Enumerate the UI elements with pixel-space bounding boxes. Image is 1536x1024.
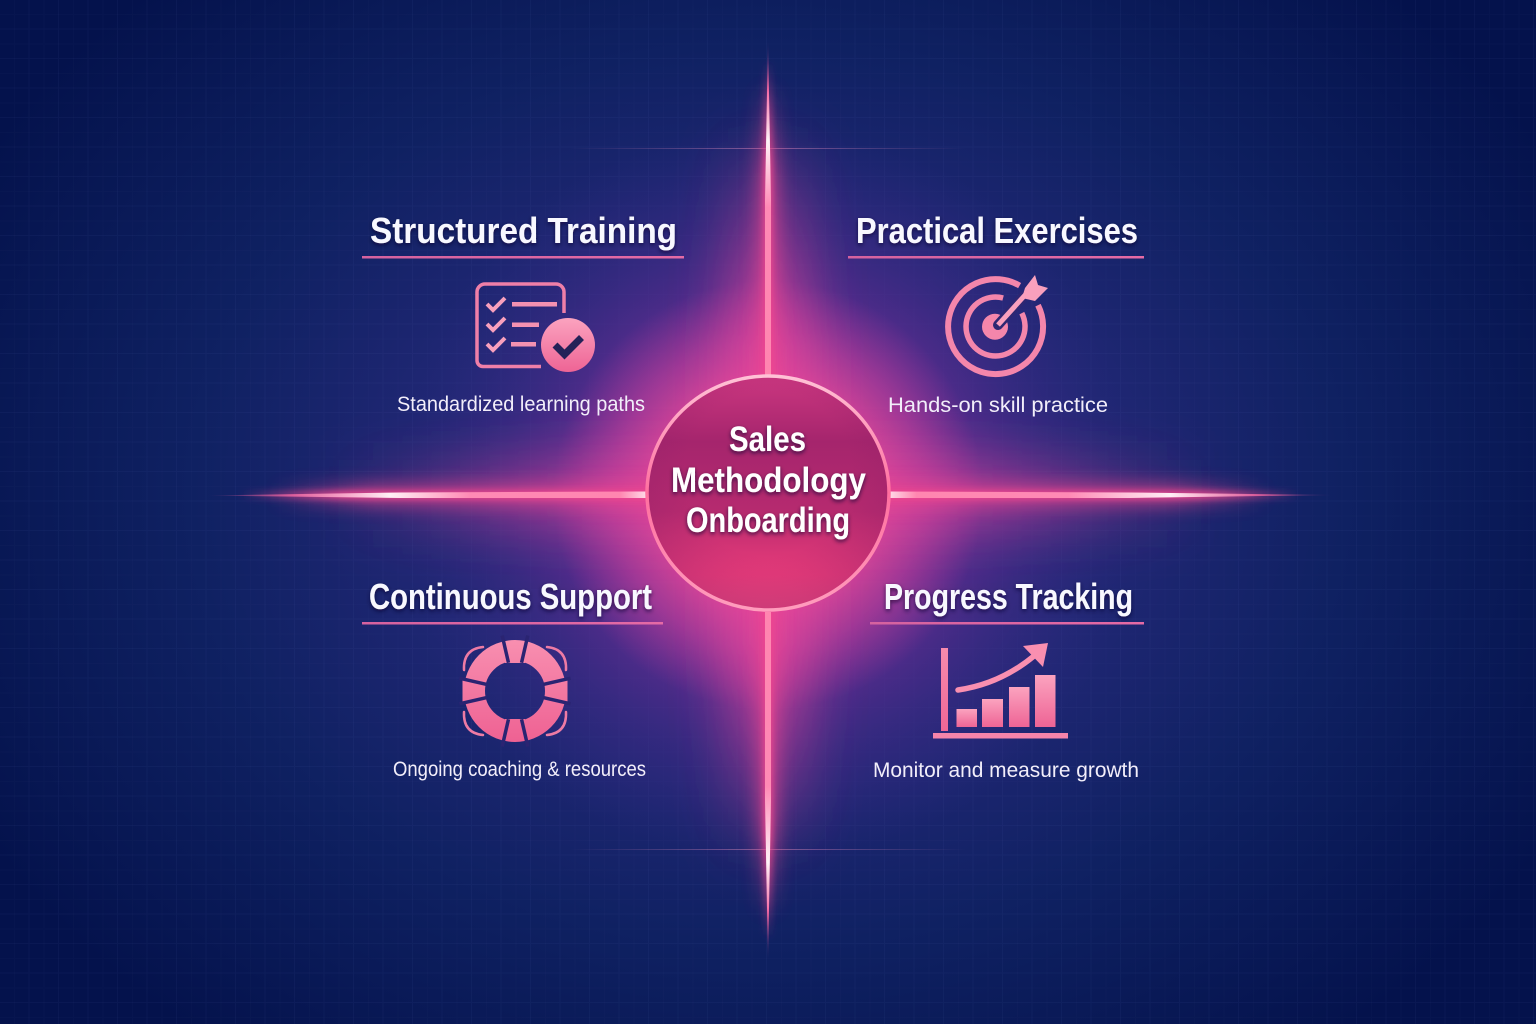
heading: continuous support: Continuous Support <box>369 576 652 617</box>
description: ongoing coaching and resources: Ongoing coaching & resources <box>393 758 646 781</box>
heading underline <box>362 256 684 258</box>
center title: Onboarding <box>686 501 850 540</box>
icon: lifebuoy <box>459 635 571 747</box>
description: monitor and measure growth: Monitor and measure growth <box>873 759 1139 782</box>
panel: progress tracking <box>870 576 1144 782</box>
icon: target with arrow <box>948 275 1048 374</box>
panel: practical exercises <box>848 210 1144 417</box>
panel: continuous support <box>362 576 663 781</box>
heading: practical exercises: Practical Exercises <box>856 210 1138 251</box>
description: standardized learning paths: Standardized learning paths <box>397 393 645 416</box>
heading underline <box>870 622 1144 624</box>
heading underline <box>362 622 663 624</box>
center title <box>671 420 866 540</box>
description: hands-on skill practice: Hands-on skill practice <box>888 394 1108 417</box>
faint horizontal accent lines <box>570 148 966 850</box>
panel: structured training <box>362 210 684 416</box>
center title: Methodology <box>671 461 866 500</box>
center circle <box>647 376 889 610</box>
center title: Sales <box>729 420 806 459</box>
heading: progress tracking: Progress Tracking <box>884 576 1133 617</box>
heading underline <box>848 256 1144 258</box>
icon: growth bar chart <box>933 643 1068 738</box>
central purple and pink glow <box>330 120 1210 870</box>
icon: checklist <box>477 284 595 372</box>
cross light beams <box>205 40 1335 962</box>
heading: structured training: Structured Training <box>370 210 677 251</box>
